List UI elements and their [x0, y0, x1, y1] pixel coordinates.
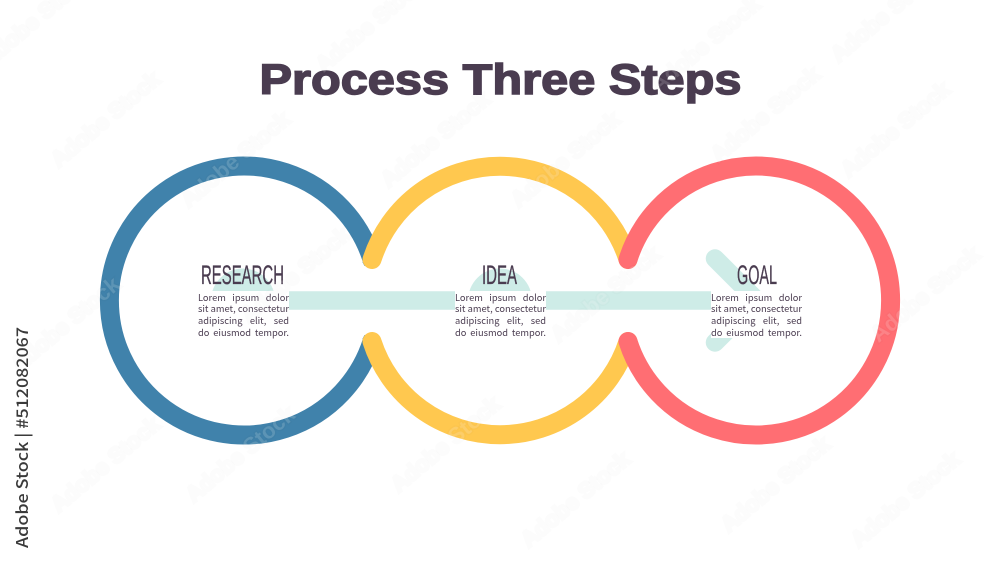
heading: goal: GOAL: [737, 260, 777, 290]
watermark pattern: Adobe Stock: [236, 221, 355, 327]
watermark pattern: Adobe Stock: [386, 391, 505, 497]
text block: research: eiusmod: [213, 325, 251, 339]
title: Process Three Steps: [260, 56, 742, 104]
text block: idea: dolor: [523, 290, 546, 304]
watermark pattern: Adobe Stock: [506, 106, 625, 212]
text block: idea: [455, 291, 546, 338]
text block: idea: amet,: [468, 301, 493, 315]
text block: goal: dolor: [779, 290, 802, 304]
text block: idea: elit,: [507, 313, 523, 327]
text block: research: Lorem: [198, 290, 226, 304]
text block: goal: amet,: [724, 301, 749, 315]
watermark pattern: Adobe Stock: [516, 446, 635, 552]
panel: research step: [198, 260, 289, 339]
text block: idea: tempor.: [512, 325, 546, 339]
text block: idea: eiusmod: [470, 325, 508, 339]
heading: research: RESEARCH: [201, 260, 284, 290]
text block: idea: sed: [531, 313, 546, 327]
text block: research: [198, 291, 289, 338]
text block: goal: consectetur: [751, 301, 802, 315]
watermark pattern: Adobe Stock: [46, 411, 165, 517]
watermark pattern: Adobe Stock: [181, 401, 300, 507]
panel: idea step: [455, 260, 546, 339]
text block: idea: consectetur: [495, 301, 546, 315]
text block: research: tempor.: [255, 325, 289, 339]
panel: goal step: [711, 260, 802, 339]
text block: research: sit: [198, 301, 208, 315]
ring: yellow idea: [372, 166, 628, 435]
watermark pattern: Adobe Stock: [6, 271, 125, 377]
heading: idea: IDEA: [482, 260, 517, 290]
watermark pattern: Adobe Stock: [546, 241, 665, 347]
ring: red goal: [628, 166, 891, 435]
text block: goal: sit: [711, 301, 721, 315]
text block: goal: ipsum: [745, 290, 772, 304]
watermark pattern: Adobe Stock: [716, 431, 835, 537]
watermark pattern: Adobe Stock: [866, 241, 985, 347]
text block: goal: [711, 291, 802, 338]
watermark pattern: Adobe Stock: [846, 446, 965, 552]
text block: idea: ipsum: [489, 290, 516, 304]
text block: goal: adipiscing: [711, 313, 755, 327]
text block: goal: sed: [787, 313, 802, 327]
ring: blue research: [109, 166, 372, 435]
text block: research: sed: [274, 313, 289, 327]
text block: goal: tempor.: [768, 325, 802, 339]
watermark pattern: Adobe Stock: [706, 61, 825, 167]
background arrow: [211, 258, 757, 342]
watermark pattern: Adobe Stock: [176, 106, 295, 212]
watermark pattern: Adobe Stock: [836, 76, 955, 182]
text block: idea: Lorem: [455, 290, 483, 304]
text block: idea: adipiscing: [455, 313, 499, 327]
watermark pattern: Adobe Stock: [376, 86, 495, 192]
watermark pattern: Adobe Stock: [46, 66, 165, 172]
text block: research: adipiscing: [198, 313, 242, 327]
text block: research: do: [198, 325, 209, 339]
text block: research: ipsum: [232, 290, 259, 304]
text block: research: dolor: [266, 290, 289, 304]
text block: goal: do: [711, 325, 722, 339]
text block: goal: Lorem: [711, 290, 739, 304]
text block: research: elit,: [250, 313, 266, 327]
text block: goal: elit,: [763, 313, 779, 327]
text block: idea: sit: [455, 301, 465, 315]
text block: idea: do: [455, 325, 466, 339]
text block: goal: eiusmod: [726, 325, 764, 339]
text block: research: amet,: [211, 301, 236, 315]
text block: research: consectetur: [238, 301, 289, 315]
